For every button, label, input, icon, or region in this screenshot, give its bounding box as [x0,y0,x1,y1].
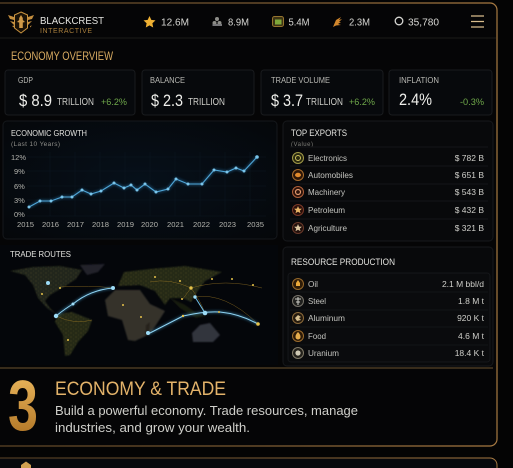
chart heading: ECONOMIC GROWTH [11,128,87,138]
KPI card: trade volume: +6.2% [349,97,375,107]
row: machinery: Machinery [308,187,346,197]
row: agriculture: $ 321 B [455,223,484,233]
row: steel [292,296,485,306]
stat: energy: 2.3M [349,18,370,28]
row: oil: 2.1 M bbl/d [442,279,484,289]
row: uranium: Uranium [308,348,339,358]
section description: Build a powerful economy. Trade resources, manage [55,404,358,418]
row: electronics [292,152,484,164]
KPI card: GDP: +6.2% [101,97,127,107]
chart heading: (Last 10 Years) [11,141,60,148]
resource heading: RESOURCE PRODUCTION [291,257,395,268]
stat: energy [333,17,370,28]
section description [55,404,358,435]
line chart [28,155,259,208]
row: food [292,330,485,342]
KPI card: trade volume [261,70,383,115]
exports heading [291,128,347,148]
y axis labels: 3% [14,196,25,205]
x axis labels: 2015 [17,220,34,229]
blue routes [56,288,258,334]
next panel peek [0,458,497,468]
row: uranium [292,348,485,358]
stat: ring [395,17,439,28]
KPI card: balance: BALANCE [150,76,185,85]
KPI card: GDP: GDP [18,76,33,85]
y axis labels [11,153,26,219]
row: petroleum: Petroleum [308,205,345,215]
row: steel: Steel [308,296,326,306]
y axis labels: 12% [11,153,26,162]
land speckle [10,266,222,356]
row: machinery: $ 543 B [455,187,484,197]
icon: emblem [21,462,31,468]
KPI card: trade volume: $ 3.7 [271,91,303,110]
panel: resource production [283,247,493,366]
row: petroleum [292,204,484,216]
gold routes [56,281,262,324]
stat: stars: 12.6M [161,18,189,28]
row: electronics: $ 782 B [455,153,484,163]
panel: top exports [283,121,493,241]
x axis labels: 2016 [42,220,59,229]
row: food: Food [308,331,326,341]
exports heading: (Value) [291,142,313,148]
row: petroleum: $ 432 B [455,205,484,215]
stat: ring: 35,780 [408,18,439,28]
row: uranium: 18.4 K t [455,348,485,358]
KPI card: GDP [5,70,135,115]
stat: cash [272,16,310,28]
city nodes [41,276,260,341]
KPI card: balance [142,70,254,115]
logo emblem [8,12,34,33]
x axis labels: 2023 [219,220,236,229]
KPI card: balance: TRILLION [188,97,225,108]
icon: menu [471,16,484,27]
y axis labels: 0% [14,210,25,219]
chart heading [11,128,87,148]
brand name: BLACKCREST [40,15,105,27]
y axis labels: 9% [14,167,25,176]
top navigation bar [0,12,496,38]
KPI card: GDP: TRILLION [57,97,94,108]
KPI card: inflation [389,70,492,115]
footer banner [0,367,493,446]
KPI card: inflation: -0.3% [460,97,484,107]
row: electronics: Electronics [308,153,347,163]
KPI card: inflation: 2.4% [399,90,432,109]
row: food: 4.6 M t [458,331,485,341]
row: automobiles: Automobiles [308,170,353,180]
section title: ECONOMY & TRADE [55,378,226,400]
row: agriculture: Agriculture [308,223,347,233]
row: aluminum: 920 K t [457,313,485,323]
KPI card: trade volume: TRILLION [306,97,343,108]
stat: cash: 5.4M [288,18,310,28]
KPI card: trade volume: TRADE VOLUME [271,76,330,85]
KPI card: GDP: $ 8.9 [19,91,52,110]
x axis labels: 2020 [141,220,158,229]
world map [10,264,262,356]
y axis labels: 6% [14,182,25,191]
panel: trade routes [0,245,278,365]
x axis labels: 2017 [67,220,84,229]
row: oil [292,278,484,290]
x axis labels [17,220,264,229]
stat: stars [144,16,189,28]
x axis labels: 2035 [247,220,264,229]
row: automobiles [292,170,484,180]
KPI card: balance: $ 2.3 [151,91,183,110]
exports heading: TOP EXPORTS [291,128,347,138]
row: machinery [292,186,484,198]
trade routes heading: TRADE ROUTES [10,249,71,259]
x axis labels: 2018 [92,220,109,229]
brand name [40,15,105,35]
KPI card: inflation: INFLATION [399,76,439,85]
section description: industries, and grow your wealth. [55,421,250,435]
panel: economic growth [3,121,277,239]
brand name: INTERACTIVE [40,28,92,35]
row: oil: Oil [308,279,318,289]
heading: economy overview: ECONOMY OVERVIEW [11,51,113,63]
stat: population [212,17,249,28]
row: automobiles: $ 651 B [455,170,484,180]
row: steel: 1.8 M t [458,296,485,306]
row: agriculture [292,222,484,234]
stat: population: 8.9M [228,18,249,28]
row: aluminum [292,312,485,324]
row: aluminum: Aluminum [308,313,345,323]
x axis labels: 2022 [193,220,210,229]
x axis labels: 2019 [117,220,134,229]
big section number: 3 [8,367,38,446]
x axis labels: 2021 [167,220,184,229]
